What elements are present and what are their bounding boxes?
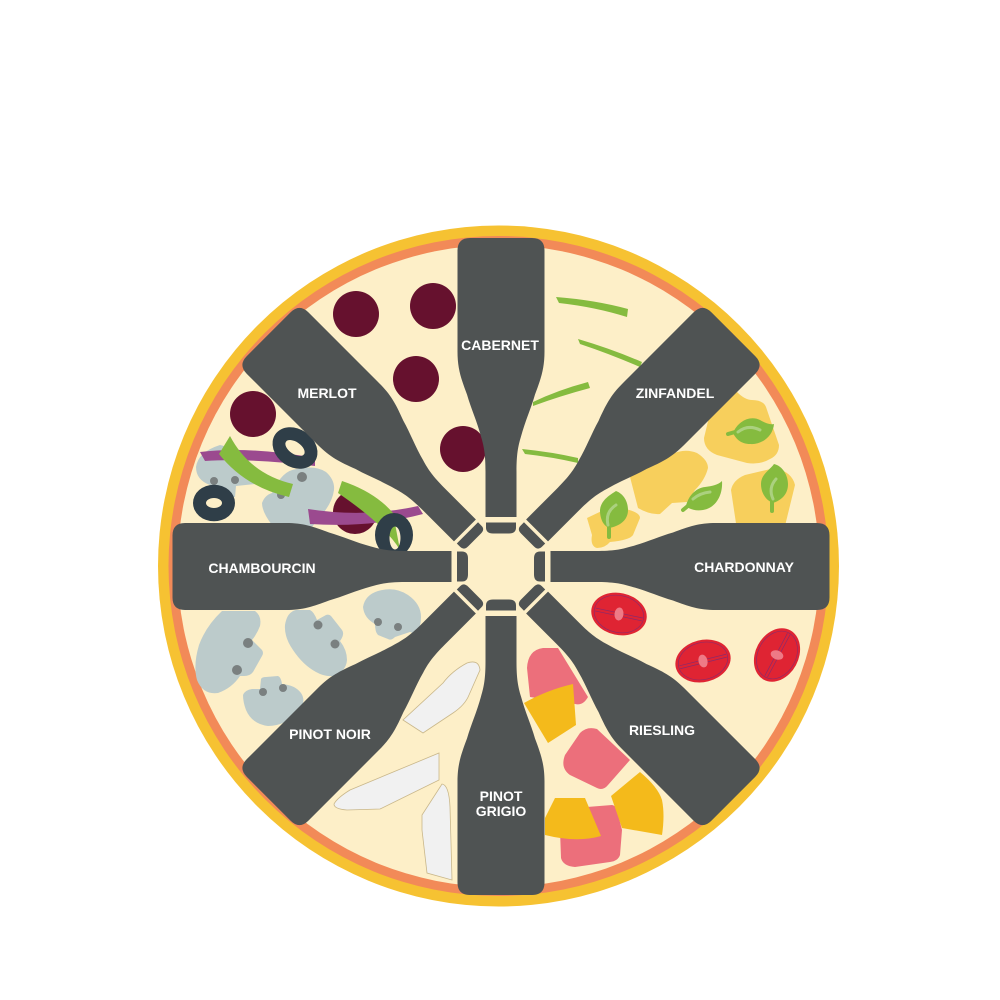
label: Pinot Noir: PINOT NOIR (289, 726, 371, 742)
bottle: Cabernet (458, 238, 544, 534)
pizza crust (158, 226, 839, 906)
label: Pinot Grigio: PINOT (480, 788, 522, 804)
toppings: ham pieces (Riesling) (527, 648, 630, 867)
toppings: cheese chunks (Zinfandel) (587, 385, 795, 548)
label: Chardonnay: CHARDONNAY (694, 559, 795, 575)
label: Cabernet: CABERNET (461, 337, 539, 353)
toppings: pineapple pieces (Riesling) (524, 684, 664, 839)
label: Chambourcin: CHAMBOURCIN (208, 560, 316, 576)
label: Merlot: MERLOT (297, 385, 357, 401)
bottle: Zinfandel (497, 303, 764, 571)
toppings: mushrooms (Pinot Noir) (195, 589, 421, 726)
toppings: basil leaves (Zinfandel) (600, 418, 788, 537)
toppings: mixed supreme (Chambourcin) (193, 419, 423, 557)
bottle: Merlot (238, 303, 505, 571)
label: Riesling: RIESLING (629, 722, 695, 738)
toppings: salami slices (Chardonnay) (587, 588, 809, 690)
bottle: Pinot Grigio (458, 600, 544, 895)
bottle: Pinot Noir (238, 562, 505, 830)
toppings: pepperoni slices (Merlot) (230, 283, 486, 472)
bottle: Chardonnay (534, 523, 830, 610)
bottle: Riesling (497, 562, 764, 830)
toppings: white onion slices (Pinot Grigio) (334, 662, 480, 880)
toppings: green pepper strips (Cabernet / Zinfandel) (522, 297, 642, 463)
label: Pinot Grigio: GRIGIO (476, 803, 526, 819)
label: Zinfandel: ZINFANDEL (636, 385, 715, 401)
bottle: Chambourcin (172, 523, 468, 610)
